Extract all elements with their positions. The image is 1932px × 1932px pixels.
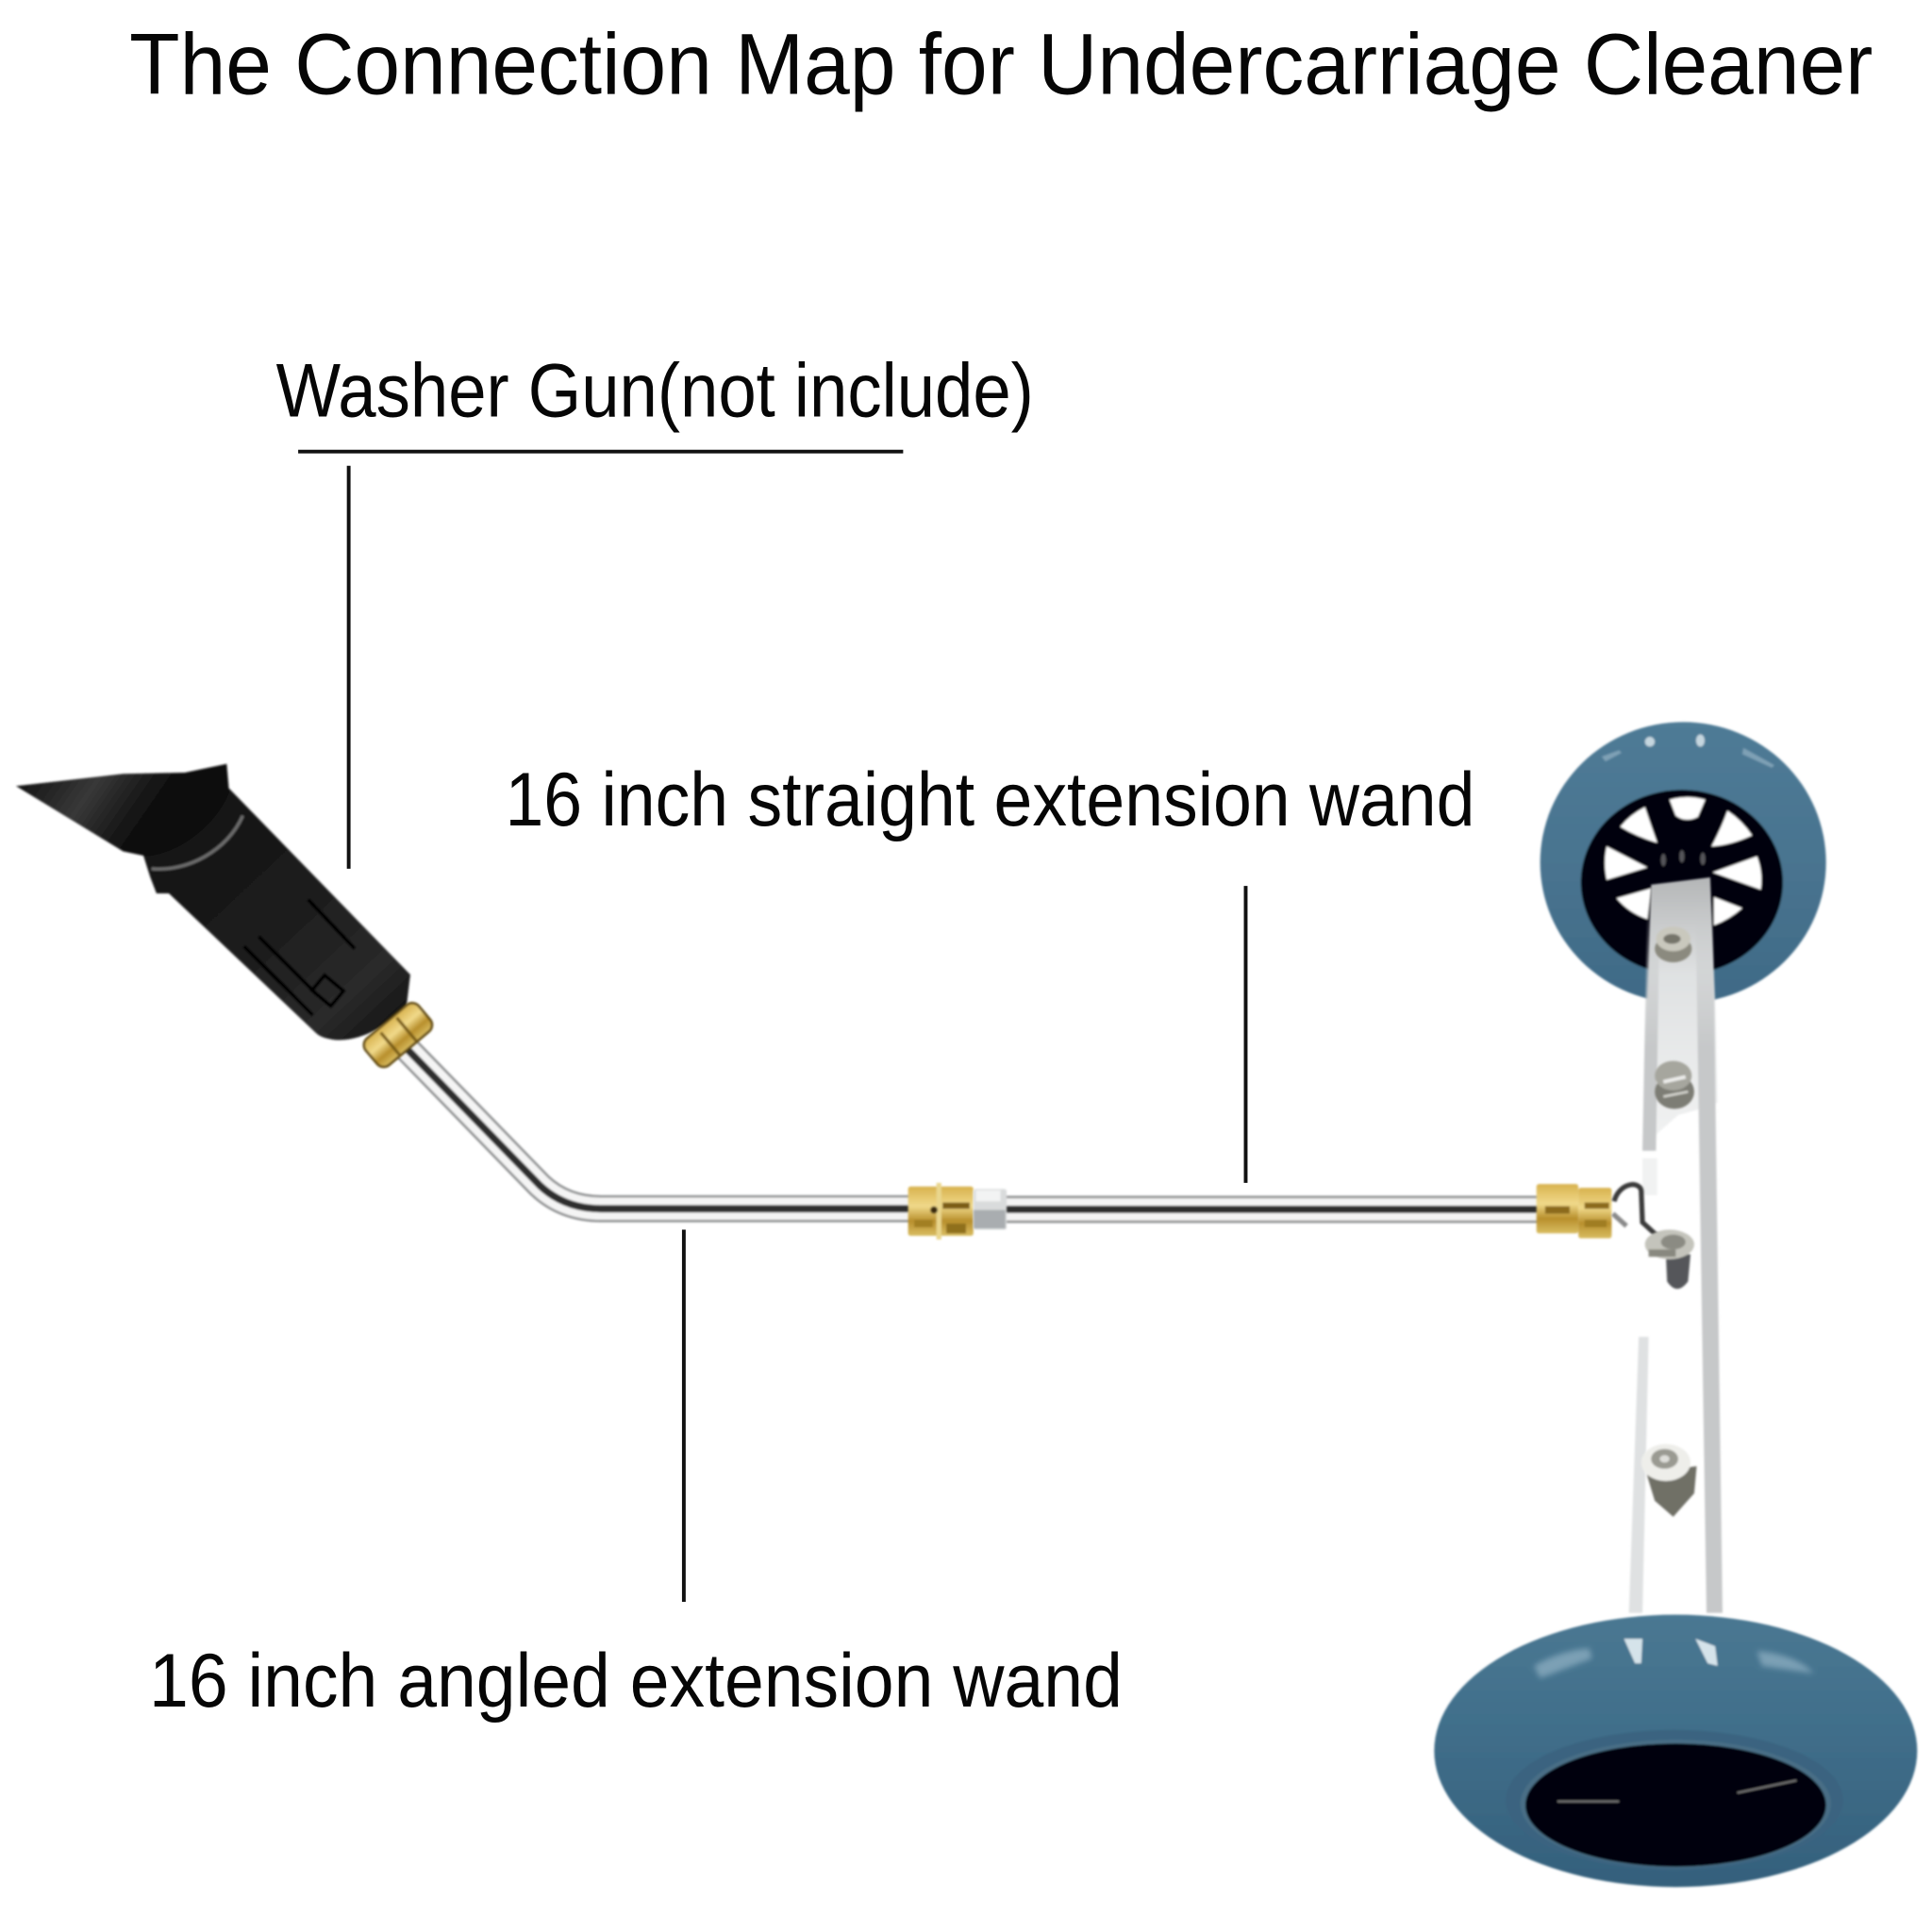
near wheel hub glints bbox=[1557, 1780, 1796, 1802]
brass quick connector: frame end bbox=[1537, 1184, 1611, 1239]
near wheel hub recess bbox=[1525, 1743, 1826, 1867]
brass quick connector: middle bbox=[908, 1183, 974, 1240]
far wheel tyre bbox=[1541, 722, 1826, 1003]
label: straight extension wand: 16 inch straight extension wand bbox=[506, 758, 1474, 842]
label: angled extension wand: 16 inch angled extension wand bbox=[149, 1639, 1123, 1724]
screw: bottom bbox=[1641, 1444, 1697, 1517]
frame pale join bbox=[1642, 1158, 1657, 1195]
near wheel tyre bbox=[1434, 1615, 1917, 1887]
gun body bbox=[142, 789, 410, 1040]
far wheel tyre highlights bbox=[1602, 734, 1774, 768]
leader line: washer gun bbox=[347, 466, 350, 869]
gun nozzle bbox=[16, 764, 229, 857]
far wheel bbox=[1541, 722, 1826, 1003]
label: washer gun: Washer Gun(not include) bbox=[276, 348, 1034, 433]
gun collar highlight bbox=[152, 816, 242, 869]
washer gun bbox=[16, 764, 410, 1040]
title: The Connection Map for Undercarriage Cleaner bbox=[129, 16, 1873, 112]
far wheel rim bbox=[1581, 790, 1783, 974]
far wheel hub marks bbox=[1661, 850, 1706, 866]
far wheel spoke openings bbox=[1605, 797, 1761, 925]
silver coupler: middle bbox=[974, 1189, 1007, 1230]
leader line: angled extension wand bbox=[682, 1230, 685, 1602]
screw: middle bbox=[1655, 1061, 1694, 1109]
screw: lower connector bbox=[1645, 1230, 1694, 1289]
angled extension wand bbox=[407, 1049, 918, 1208]
undercarriage frame bar bbox=[1629, 877, 1723, 1613]
leader line: straight extension wand bbox=[1244, 886, 1247, 1183]
brass connector: gun to angled wand bbox=[360, 1000, 436, 1071]
gun moulded grip marks bbox=[244, 899, 355, 1015]
screw: upper bbox=[1655, 926, 1691, 962]
near wheel rim edge bbox=[1521, 1740, 1831, 1868]
frame upper section bbox=[1642, 877, 1718, 1151]
straight extension wand bbox=[1001, 1199, 1541, 1220]
near wheel bbox=[1434, 1615, 1917, 1887]
frame right strip bbox=[1695, 899, 1723, 1613]
frame left upper strip bbox=[1642, 899, 1659, 1151]
label underline: washer gun bbox=[298, 450, 903, 453]
near wheel inner ring bbox=[1506, 1730, 1843, 1871]
hose hook fitting bbox=[1613, 1185, 1657, 1236]
frame left strip bbox=[1629, 1337, 1649, 1613]
near wheel tyre highlights bbox=[1534, 1639, 1814, 1678]
